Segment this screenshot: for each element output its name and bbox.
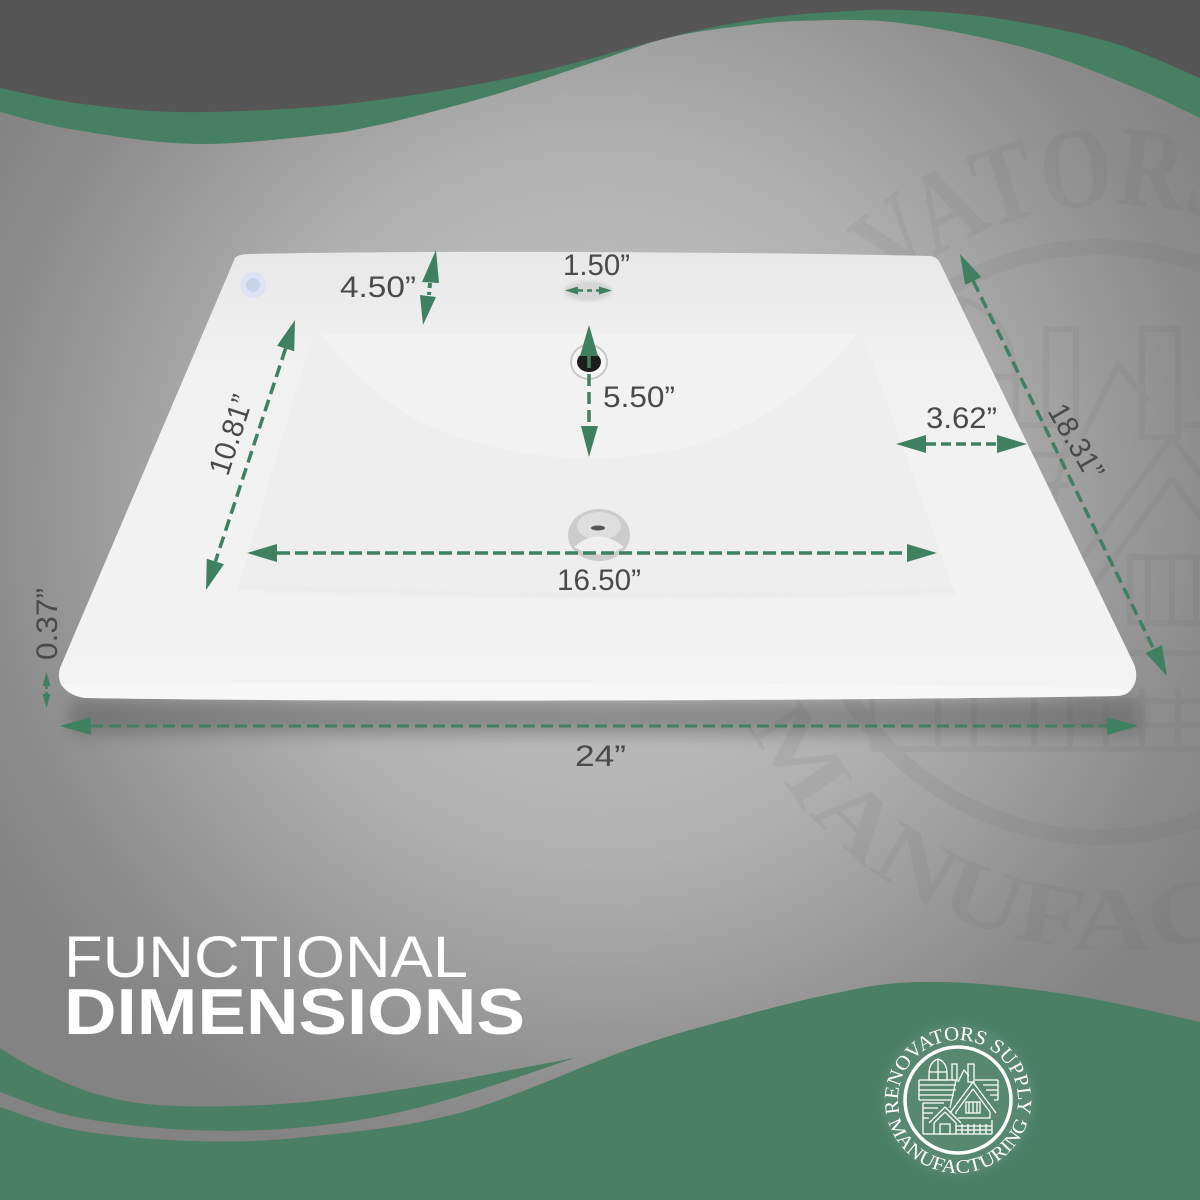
dimension 18.31: 18.31” — [1041, 398, 1111, 486]
top wave: green band — [0, 0, 1200, 144]
dimension 0.37 — [31, 588, 64, 708]
sink top surface — [59, 252, 1136, 701]
dimension 24: 24” — [575, 740, 626, 773]
title: DIMENSIONS — [64, 975, 525, 1048]
logo ring — [905, 1047, 1011, 1153]
dimension 10.81: 10.81” — [203, 391, 260, 479]
dimension 18.31 — [960, 254, 1167, 676]
drain — [568, 509, 630, 561]
dimension 5.50: 5.50” — [603, 381, 675, 414]
top wave: dark band — [0, 0, 1200, 112]
dimension 4.50 — [340, 250, 439, 325]
bottom wave: small green swoosh — [0, 1048, 574, 1131]
overflow hole — [571, 345, 607, 379]
dimension 16.50 — [247, 544, 937, 597]
basin edge shade — [238, 588, 955, 597]
dimension 4.50: 4.50” — [340, 271, 416, 304]
dimension 5.50 — [580, 325, 675, 457]
dimension 16.50: 16.50” — [557, 564, 641, 597]
dimension 3.62: 3.62” — [926, 402, 997, 435]
dimension 24 — [60, 717, 1138, 773]
sink logo sticker — [240, 272, 266, 298]
dimension 1.50: 1.50” — [563, 249, 630, 282]
dimension 0.37: 0.37” — [31, 588, 64, 660]
basin — [238, 327, 955, 597]
title — [64, 925, 525, 1048]
dimension 3.62 — [896, 402, 1027, 453]
faucet hole — [564, 281, 612, 301]
title: FUNCTIONAL — [64, 925, 468, 990]
front edge highlight — [62, 683, 1130, 701]
logo text bottom: MANUFACTURING — [888, 1117, 1027, 1174]
sink shadow — [70, 700, 1140, 734]
logo house — [919, 1059, 998, 1134]
logo text top: RENOVATORS SUPPLY — [884, 1026, 1032, 1114]
brand logo — [883, 1025, 1033, 1175]
dimension 10.81 — [203, 320, 295, 590]
bowl — [320, 333, 857, 458]
bottom wave: main green area — [0, 982, 1200, 1200]
watermark logo — [756, 740, 832, 788]
sink — [59, 252, 1136, 701]
